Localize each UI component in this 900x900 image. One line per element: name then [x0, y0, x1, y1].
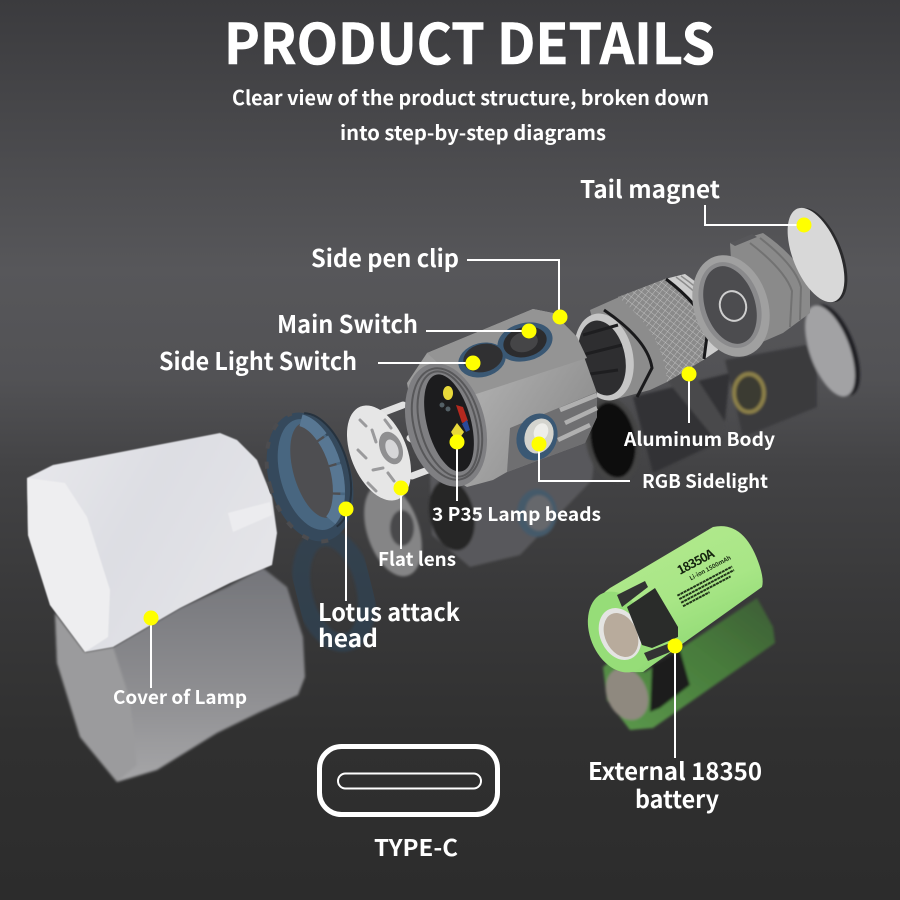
main switch — [493, 317, 557, 367]
battery label: Li-ion 1500mAh — [688, 553, 733, 582]
callout: main switch — [277, 305, 536, 340]
lotus attack head ring — [252, 402, 368, 552]
callout: tail magnet — [580, 170, 812, 232]
callout: main switch: Main Switch — [277, 305, 418, 340]
callout: side pen clip — [311, 239, 568, 324]
cover of lamp — [27, 433, 277, 652]
reflection: head — [423, 440, 597, 567]
tail magnet disc — [776, 200, 859, 310]
callout: cover of lamp — [113, 610, 247, 710]
callout: lotus attack head: Lotus attack — [318, 593, 460, 628]
callout: aluminum body: Aluminum Body — [623, 425, 775, 452]
callout: tail magnet: Tail magnet — [580, 170, 720, 205]
callout: cover of lamp: Cover of Lamp — [113, 683, 247, 710]
reflection: battery — [598, 598, 775, 730]
label: Type-C: TYPE-C — [374, 829, 458, 863]
callout: external battery — [588, 638, 762, 815]
tail cap — [680, 233, 810, 367]
callout: lotus attack head — [318, 502, 460, 654]
title: PRODUCT DETAILS — [224, 0, 715, 81]
reflection: cover — [55, 568, 305, 782]
RGB sidelight — [509, 407, 565, 467]
callout: external battery: battery — [635, 780, 719, 815]
callout: flat lens: Flat lens — [378, 545, 456, 572]
reflection: body and tail — [579, 298, 870, 487]
icon: Type-C port — [320, 746, 498, 814]
side light switch — [455, 338, 509, 382]
flashlight head — [392, 309, 597, 496]
callout: side light switch: Side Light Switch — [159, 342, 357, 377]
reflection: lens — [353, 476, 433, 584]
callout: aluminum body — [623, 366, 775, 452]
callout: RGB sidelight: RGB Sidelight — [642, 467, 768, 494]
battery label: 18350A — [673, 543, 718, 579]
callout: lotus attack head: head — [318, 619, 378, 654]
callout: RGB sidelight — [532, 436, 768, 494]
lamp beads — [440, 386, 470, 442]
18350 battery — [576, 526, 763, 682]
callout: lamp beads: 3 P35 Lamp beads — [432, 500, 601, 527]
callout: lamp beads — [432, 434, 601, 527]
callout: flat lens — [378, 480, 456, 572]
callout: external battery: External 18350 — [588, 752, 762, 787]
reflection: ring — [291, 530, 377, 650]
subtitle: into step-by-step diagrams — [340, 117, 606, 146]
flat lens — [334, 396, 428, 510]
callout: side light switch — [159, 342, 480, 377]
subtitle — [232, 82, 709, 146]
reflections of the product parts — [55, 298, 870, 782]
subtitle: Clear view of the product structure, broken down — [232, 82, 709, 111]
aluminum body — [566, 274, 725, 406]
battery label — [662, 537, 740, 606]
callout: side pen clip: Side pen clip — [311, 239, 459, 274]
